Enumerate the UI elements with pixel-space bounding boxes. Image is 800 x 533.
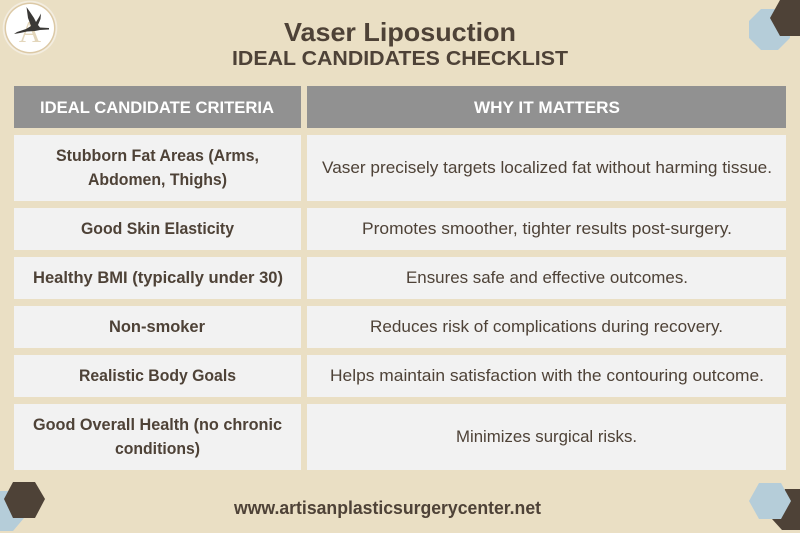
row: non-smoker: Reduces risk of complications during recovery. [370,318,723,336]
row: non-smoker: Non-smoker [109,318,206,336]
row: realistic body goals: Helps maintain satisfaction with the contouring outcome. [330,367,764,385]
row: healthy BMI: Healthy BMI (typically under 30) [33,269,283,287]
header: why it matters: WHY IT MATTERS [474,99,620,117]
decoration: bottom right hexagons [749,483,800,530]
header: ideal candidate criteria: IDEAL CANDIDATE CRITERIA [40,99,274,117]
row: realistic body goals: Realistic Body Goals [79,367,236,385]
row: good overall health: Good Overall Health (no chronic [33,416,282,434]
row: good skin elasticity [14,208,786,250]
table [14,86,786,470]
header: why it matters [307,86,786,128]
decoration: bottom left hexagons [0,482,45,531]
row: good skin elasticity: Good Skin Elasticity [81,220,235,238]
title [232,17,568,70]
row: stubborn fat areas: Abdomen, Thighs) [88,171,227,189]
row: non-smoker [14,306,786,348]
header: ideal candidate criteria [14,86,301,128]
row: good overall health: conditions) [115,440,200,458]
row: stubborn fat areas: Stubborn Fat Areas (Arms, [56,147,259,165]
row: good overall health [14,404,786,470]
row: stubborn fat areas: Vaser precisely targets localized fat without harming tissue. [322,159,772,177]
row: good skin elasticity: Promotes smoother, tighter results post-surgery. [362,220,732,238]
title: IDEAL CANDIDATES CHECKLIST [232,47,568,70]
footer website: www.artisanplasticsurgerycenter.net [233,498,541,518]
row: stubborn fat areas [14,135,786,201]
decoration: top right hexagons [749,0,800,50]
logo badge [3,1,57,55]
row: realistic body goals [14,355,786,397]
row: healthy BMI: Ensures safe and effective outcomes. [406,269,688,287]
logo badge: A [19,14,42,49]
title: Vaser Liposuction [284,17,516,47]
row: healthy BMI [14,257,786,299]
row: good overall health: Minimizes surgical risks. [456,428,637,446]
